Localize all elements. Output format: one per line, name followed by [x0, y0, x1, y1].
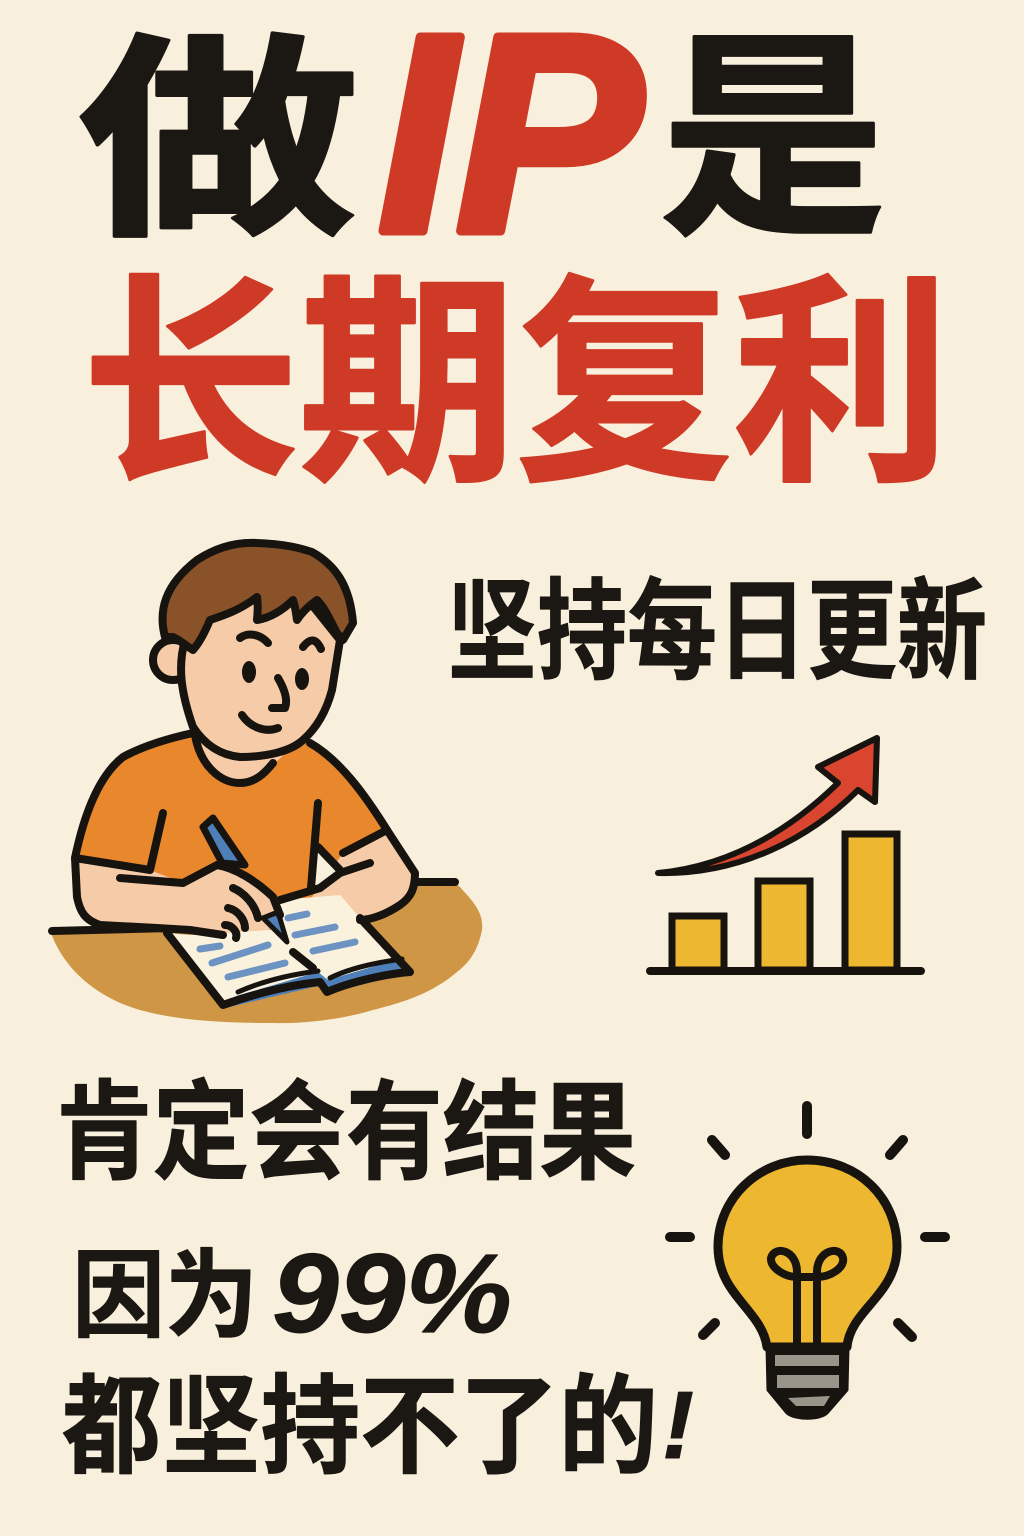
filament: [771, 1251, 843, 1347]
text: because 99 percent: [72, 1231, 512, 1356]
bulb base: [767, 1347, 848, 1418]
icon: light bulb: [670, 1106, 945, 1418]
gap between arm and torso: [313, 847, 340, 888]
icon: rising bar chart with arrow: [650, 738, 921, 971]
text: there will be results: 肯定会有结果: [56, 1072, 636, 1193]
bulb glass: [718, 1160, 897, 1347]
text: cannot persist: !: [662, 1372, 694, 1479]
illustration: boy writing at desk: [50, 543, 482, 1023]
title line 1: 是: [660, 17, 886, 263]
hair: [163, 543, 353, 650]
face: [181, 590, 340, 757]
facial features: [240, 635, 321, 730]
title line 1: 做: [78, 21, 360, 263]
title line 1: [78, 0, 886, 291]
shirt outline and sleeves: [75, 733, 387, 888]
title line 2: 长期复利: [82, 262, 950, 510]
desk: [50, 882, 482, 1023]
text: because 99 percent: 99%: [272, 1231, 512, 1356]
neck: [195, 700, 300, 783]
text: because 99 percent: 因为: [72, 1243, 258, 1350]
book: [167, 895, 410, 1005]
bars: [672, 916, 724, 970]
axis: [650, 967, 921, 975]
arrow: [658, 738, 877, 873]
left arm: [76, 858, 280, 935]
right arm: [310, 830, 415, 922]
arm and finger outlines: [75, 830, 415, 938]
pen: [203, 818, 245, 865]
text: cannot persist: 都坚持不了的: [62, 1366, 658, 1487]
rays: [670, 1106, 945, 1337]
ear: [153, 640, 193, 680]
shirt: [75, 733, 387, 900]
